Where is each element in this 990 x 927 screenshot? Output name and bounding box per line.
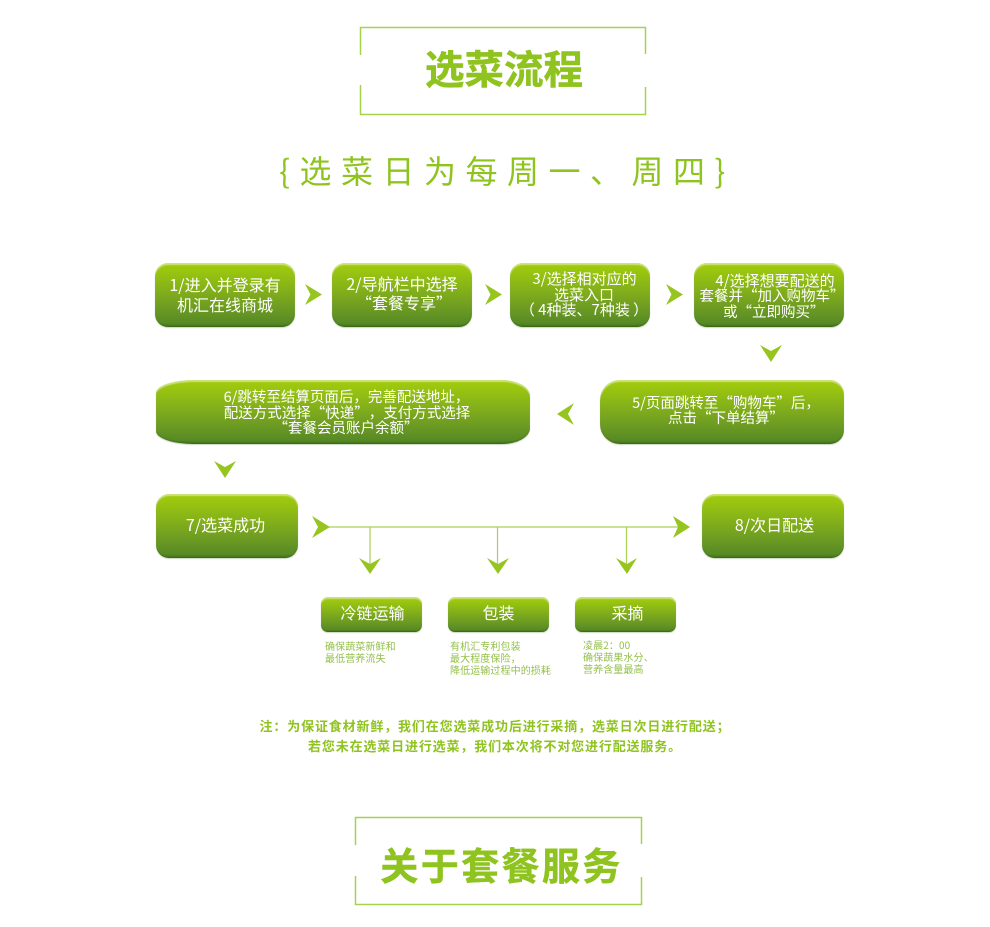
note text: 注：为保证食材新鲜，我们在您选菜成功后进行采摘，选菜日次日进行配送；: [260, 716, 730, 735]
caption: picking: 营养含量最高: [583, 661, 644, 676]
caption: cold chain: 最低营养流失: [325, 650, 386, 665]
caption: packaging: 降低运输过程中的损耗: [450, 662, 551, 677]
step 4 box: 4/选择想要配送的: [715, 270, 835, 291]
note text: 若您未在选菜日进行选菜，我们本次将不对您进行配送服务。: [308, 736, 682, 755]
step 6 box: 6/跳转至结算页面后，完善配送地址，: [224, 386, 469, 407]
arrow: step 2 to 3: [485, 284, 502, 305]
title frame: 选菜流程: [360, 26, 646, 116]
note text: [260, 716, 730, 755]
caption: cold chain: [325, 638, 396, 665]
caption: picking: 凌晨2：00: [583, 637, 630, 652]
connector: step 7 to 8 with branches: [312, 516, 690, 574]
caption: packaging: [450, 638, 551, 677]
title frame: 关于套餐服务: [354, 816, 642, 906]
step 4 box: 或“立即购买”: [723, 301, 824, 322]
step 1 box: 机汇在线商城: [177, 292, 273, 316]
step 7 box: 7/选菜成功: [186, 512, 265, 536]
step 5 box: 5/页面跳转至“购物车”后，: [632, 392, 820, 413]
arrow: step 5 to 6: [557, 403, 574, 425]
sub-step box: cold chain: [321, 597, 422, 632]
heading: 选菜流程: 选菜流程: [425, 39, 583, 96]
sub-step box: packaging: [448, 597, 549, 632]
sub-step box: picking: [575, 597, 676, 632]
subtitle: selection days: {选菜日为每周一、周四}: [279, 147, 735, 193]
step 6 box: [156, 380, 530, 444]
caption: picking: 确保蔬果水分、: [583, 649, 654, 664]
step 3 box: （ 4种装、7种装 ）: [520, 299, 648, 320]
step 6 box: 配送方式选择“快递”，支付方式选择: [224, 402, 470, 423]
sub-step box: packaging: 包装: [482, 600, 514, 624]
sub-step box: picking: 采摘: [611, 600, 644, 624]
step 5 box: [600, 380, 844, 444]
step 3 box: 3/选择相对应的: [532, 268, 637, 289]
caption: cold chain: 确保蔬菜新鲜和: [325, 638, 396, 653]
step 2 box: [332, 263, 472, 327]
step 3 box: [510, 263, 650, 327]
heading: 关于套餐服务: 关于套餐服务: [380, 836, 623, 891]
sub-step box: cold chain: 冷链运输: [340, 600, 404, 624]
arrow: step 3 to 4: [666, 284, 683, 305]
step 6 box: “套餐会员账户余额”: [274, 417, 418, 438]
step 3 box: 选菜入口: [554, 284, 614, 305]
step 4 box: [694, 263, 844, 327]
step 7 box: [156, 494, 298, 558]
step 4 box: 套餐并“加入购物车”: [700, 285, 844, 306]
arrow: step 6 to 7: [214, 461, 236, 478]
step 1 box: [155, 263, 295, 327]
step 8 box: 8/次日配送: [735, 512, 814, 536]
step 1 box: 1/进入并登录有: [169, 272, 281, 296]
step 8 box: [702, 494, 844, 558]
caption: packaging: 最大程度保险，: [450, 650, 521, 665]
caption: picking: [583, 637, 654, 676]
arrow: step 4 to 5: [760, 345, 782, 362]
step 5 box: 点击“下单结算”: [668, 407, 784, 428]
step 2 box: 2/导航栏中选择: [346, 271, 458, 295]
caption: packaging: 有机汇专利包装: [450, 638, 521, 653]
arrow: step 1 to 2: [305, 284, 322, 305]
step 2 box: “套餐专享”: [356, 290, 452, 314]
